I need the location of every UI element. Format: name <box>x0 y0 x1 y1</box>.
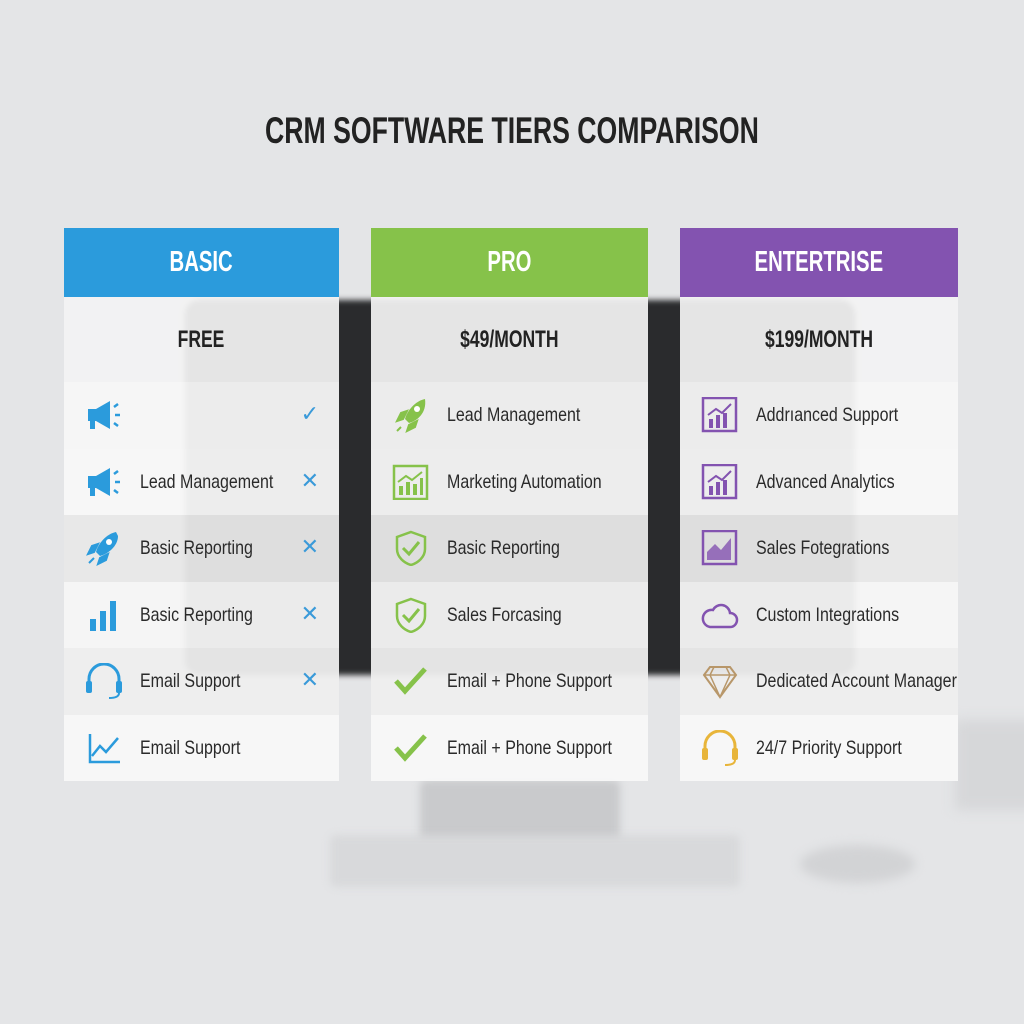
row 5 <box>371 648 648 714</box>
heading: enterprise <box>680 228 958 297</box>
panel: enterprise <box>680 228 958 781</box>
row 4: Sales Forcasing <box>447 604 562 626</box>
price: enterprise <box>680 297 958 382</box>
row 5: Email + Phone Support <box>447 670 612 692</box>
row 3: Basic Reporting <box>447 537 560 559</box>
row 5 <box>680 648 958 714</box>
row 1: ✓ <box>301 402 319 427</box>
row 4 <box>371 582 648 648</box>
row 6 <box>371 714 648 781</box>
row 2: Lead Management <box>140 470 273 492</box>
row 3: Sales Fotegrations <box>756 537 889 559</box>
row 2 <box>371 448 648 515</box>
row 4: Custom Integrations <box>756 604 899 626</box>
row 6 <box>680 714 958 781</box>
row 1: Lead Management <box>447 404 580 426</box>
heading: pro <box>371 228 648 297</box>
row 3: Basic Reporting <box>140 537 253 559</box>
row 5 <box>64 648 339 714</box>
row 4 <box>64 582 339 648</box>
price: free <box>64 297 339 382</box>
row 5: Email Support <box>140 670 240 692</box>
row 5: ✕ <box>301 668 319 693</box>
row 1: Addrıanced Support <box>756 404 898 426</box>
row 3 <box>64 515 339 582</box>
row 6: 24/7 Priority Support <box>756 736 902 758</box>
row 3 <box>371 515 648 582</box>
heading: pro: PRO <box>488 246 531 278</box>
panel: pro <box>371 228 648 781</box>
panel: basic <box>64 228 339 781</box>
heading: basic <box>64 228 339 297</box>
row 4 <box>680 582 958 648</box>
row 5: Dedicated Account Manager <box>756 670 957 692</box>
row 6 <box>64 714 339 781</box>
price: pro: $49/MONTH <box>460 326 559 353</box>
heading: basic: BASIC <box>170 246 233 278</box>
row 2: Marketing Automation <box>447 470 602 492</box>
heading: enterprise: ENTERTRISE <box>755 246 883 278</box>
price: free: FREE <box>178 326 225 353</box>
row 1 <box>64 382 339 448</box>
row 6: Email Support <box>140 736 240 758</box>
title: CRM SOFTWARE TIERS COMPARISON <box>265 110 759 151</box>
row 2 <box>680 448 958 515</box>
row 3 <box>680 515 958 582</box>
row 6: Email + Phone Support <box>447 736 612 758</box>
row 2: ✕ <box>301 468 319 494</box>
row 4: ✕ <box>301 602 319 626</box>
row 3: ✕ <box>301 535 319 560</box>
price: pro <box>371 297 648 382</box>
row 1 <box>680 382 958 448</box>
row 4: Basic Reporting <box>140 604 253 626</box>
price: enterprise: $199/MONTH <box>765 326 873 353</box>
row 2: Advanced Analytics <box>756 470 895 492</box>
row 2 <box>64 448 339 515</box>
row 1 <box>371 382 648 448</box>
